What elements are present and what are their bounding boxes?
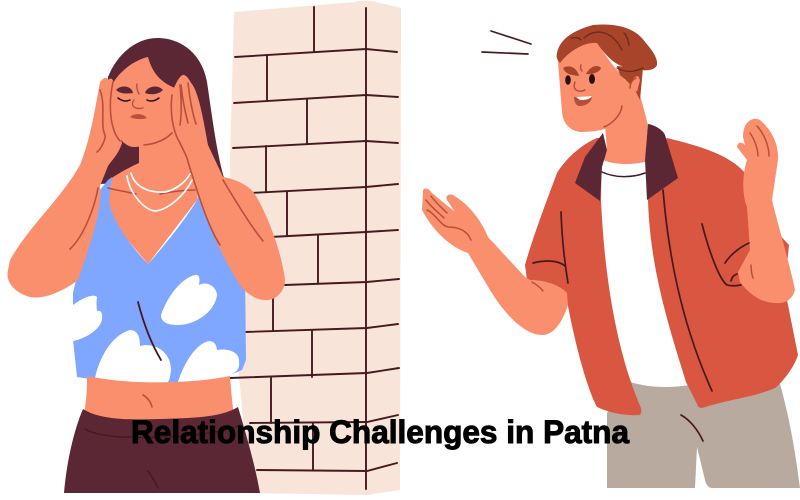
woman top <box>73 177 246 383</box>
woman face <box>112 57 175 147</box>
man hair <box>557 25 657 70</box>
woman necklace <box>127 173 192 211</box>
t-shirt collar line <box>602 172 645 177</box>
man hair back <box>617 66 643 100</box>
woman trousers <box>64 407 260 493</box>
jacket right panel <box>647 138 798 408</box>
man ear <box>630 76 640 92</box>
jacket seams <box>533 190 749 391</box>
man face features <box>563 65 636 127</box>
man face <box>558 42 630 132</box>
man collar right <box>645 124 678 200</box>
man collar left <box>575 133 607 201</box>
man left arm and hand <box>737 119 795 303</box>
man jacket and hand lines <box>426 126 769 391</box>
woman <box>7 38 285 493</box>
woman face features <box>116 84 163 119</box>
title: Relationship Challenges in Patna <box>131 414 629 450</box>
woman right arm and hand <box>171 75 285 300</box>
top cloud pattern <box>73 275 239 383</box>
closed eyes <box>118 98 159 101</box>
top crease <box>138 302 161 360</box>
white t-shirt <box>602 155 690 387</box>
navel <box>143 395 152 407</box>
nose and brow lines <box>132 84 143 108</box>
mouth <box>574 96 592 106</box>
woman midriff <box>82 376 235 425</box>
man right arm and hand <box>422 188 568 335</box>
trouser crease <box>681 415 703 441</box>
jacket left panel <box>525 138 641 415</box>
woman left arm and hand <box>7 78 122 298</box>
man neck <box>603 80 648 164</box>
shout lines <box>482 31 531 54</box>
man <box>422 25 800 488</box>
man trousers <box>607 380 800 488</box>
nose, brow and jaw lines <box>574 65 636 127</box>
wall body <box>230 1 401 495</box>
hand creases <box>426 126 769 291</box>
wall brick lines <box>230 7 399 489</box>
man hair lines <box>571 32 643 71</box>
teeth <box>576 96 592 100</box>
mouth <box>130 114 147 119</box>
trouser lines <box>85 425 240 488</box>
eyebrows <box>116 86 163 94</box>
woman hair <box>100 38 224 184</box>
brick wall <box>230 1 401 495</box>
woman neck and chest <box>108 130 198 264</box>
woman skin crease lines <box>70 82 263 249</box>
eyebrows <box>563 66 601 76</box>
eyes <box>565 75 571 85</box>
